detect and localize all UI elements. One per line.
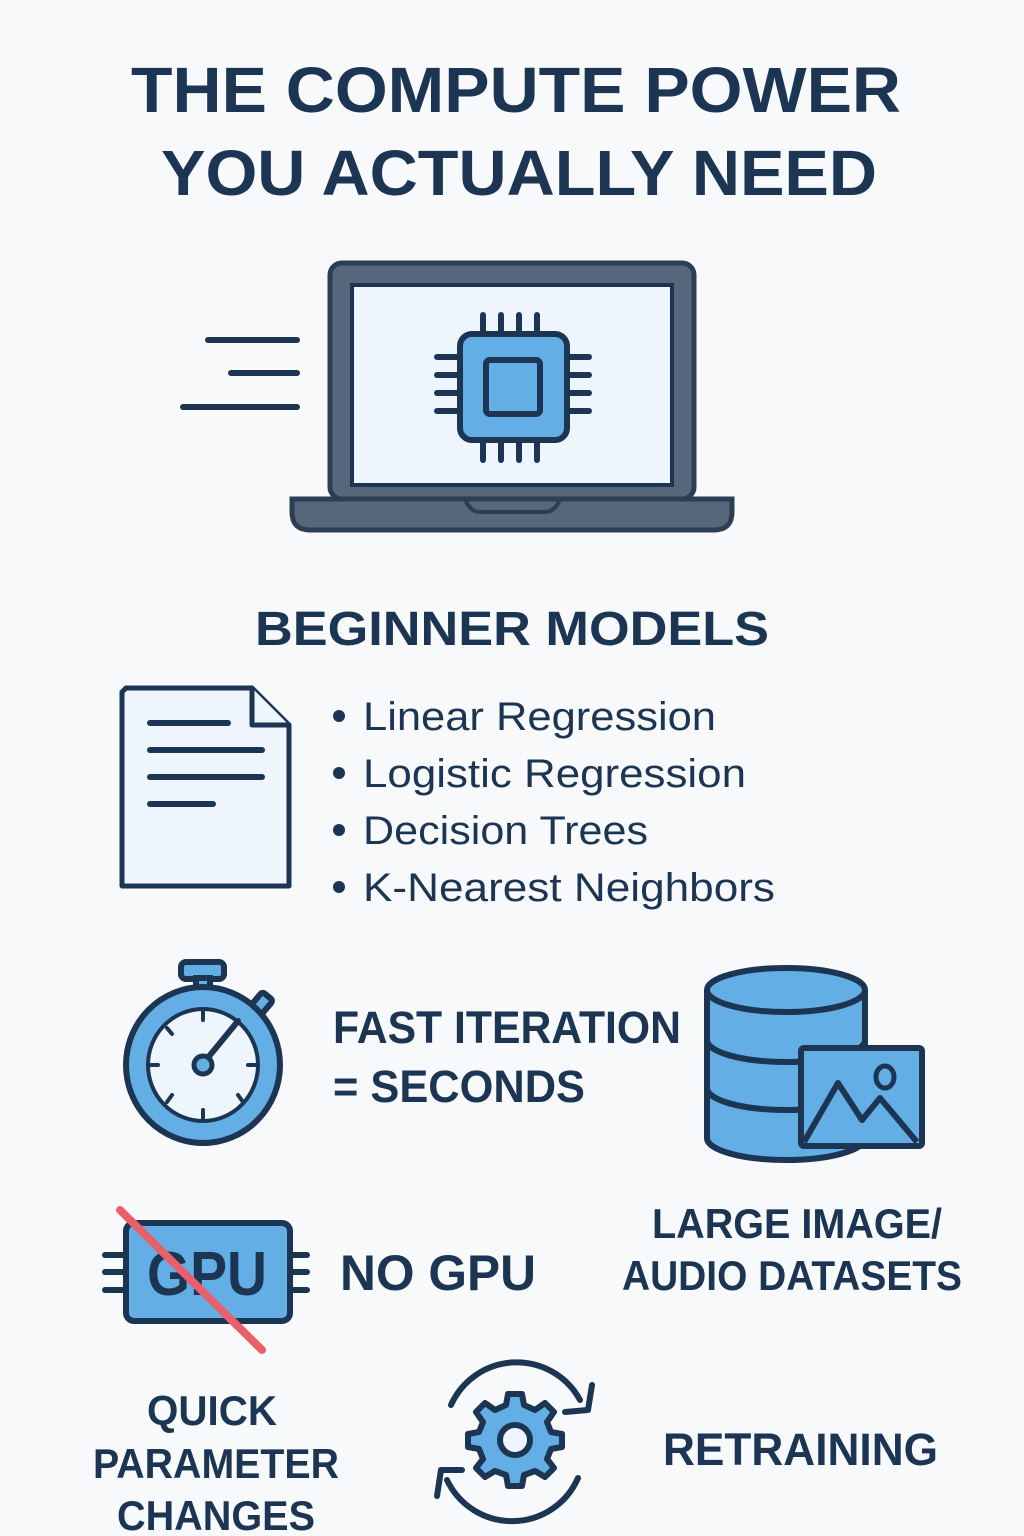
list: beginner models (333, 695, 775, 910)
icon: no gpu (105, 1210, 307, 1350)
text: no gpu: NO GPU (340, 1245, 536, 1301)
icon: no gpu: GPU (147, 1240, 267, 1309)
chip (437, 315, 589, 460)
text: quick parameter changes: PARAMETER (93, 1440, 339, 1487)
icon: document (122, 688, 289, 886)
text: retraining: RETRAINING (663, 1424, 938, 1475)
title: YOU ACTUALLY NEED (161, 137, 877, 209)
heading: beginner models: BEGINNER MODELS (255, 603, 769, 656)
icon: retraining gear with arrows (437, 1362, 592, 1521)
icon: database with image (707, 968, 922, 1160)
text: fast iteration (333, 1002, 681, 1112)
text: large image/audio datasets (622, 1200, 962, 1299)
text: quick parameter changes: QUICK (147, 1387, 277, 1434)
list: beginner models: K-Nearest Neighbors (363, 866, 775, 910)
text: fast iteration: FAST ITERATION (333, 1002, 681, 1053)
title: THE COMPUTE POWER (131, 54, 901, 126)
list: beginner models: Decision Trees (363, 809, 648, 853)
icon: laptop with chip (183, 263, 732, 530)
text: quick parameter changes (93, 1387, 339, 1536)
text: large image/audio datasets: AUDIO DATASETS (622, 1252, 962, 1299)
list: beginner models: Linear Regression (363, 695, 716, 739)
speed lines (183, 340, 297, 407)
icon: stopwatch (126, 962, 280, 1143)
title (131, 54, 901, 209)
list: beginner models: Logistic Regression (363, 752, 746, 796)
text: large image/audio datasets: LARGE IMAGE/ (652, 1200, 942, 1247)
text: fast iteration: = SECONDS (333, 1061, 585, 1112)
